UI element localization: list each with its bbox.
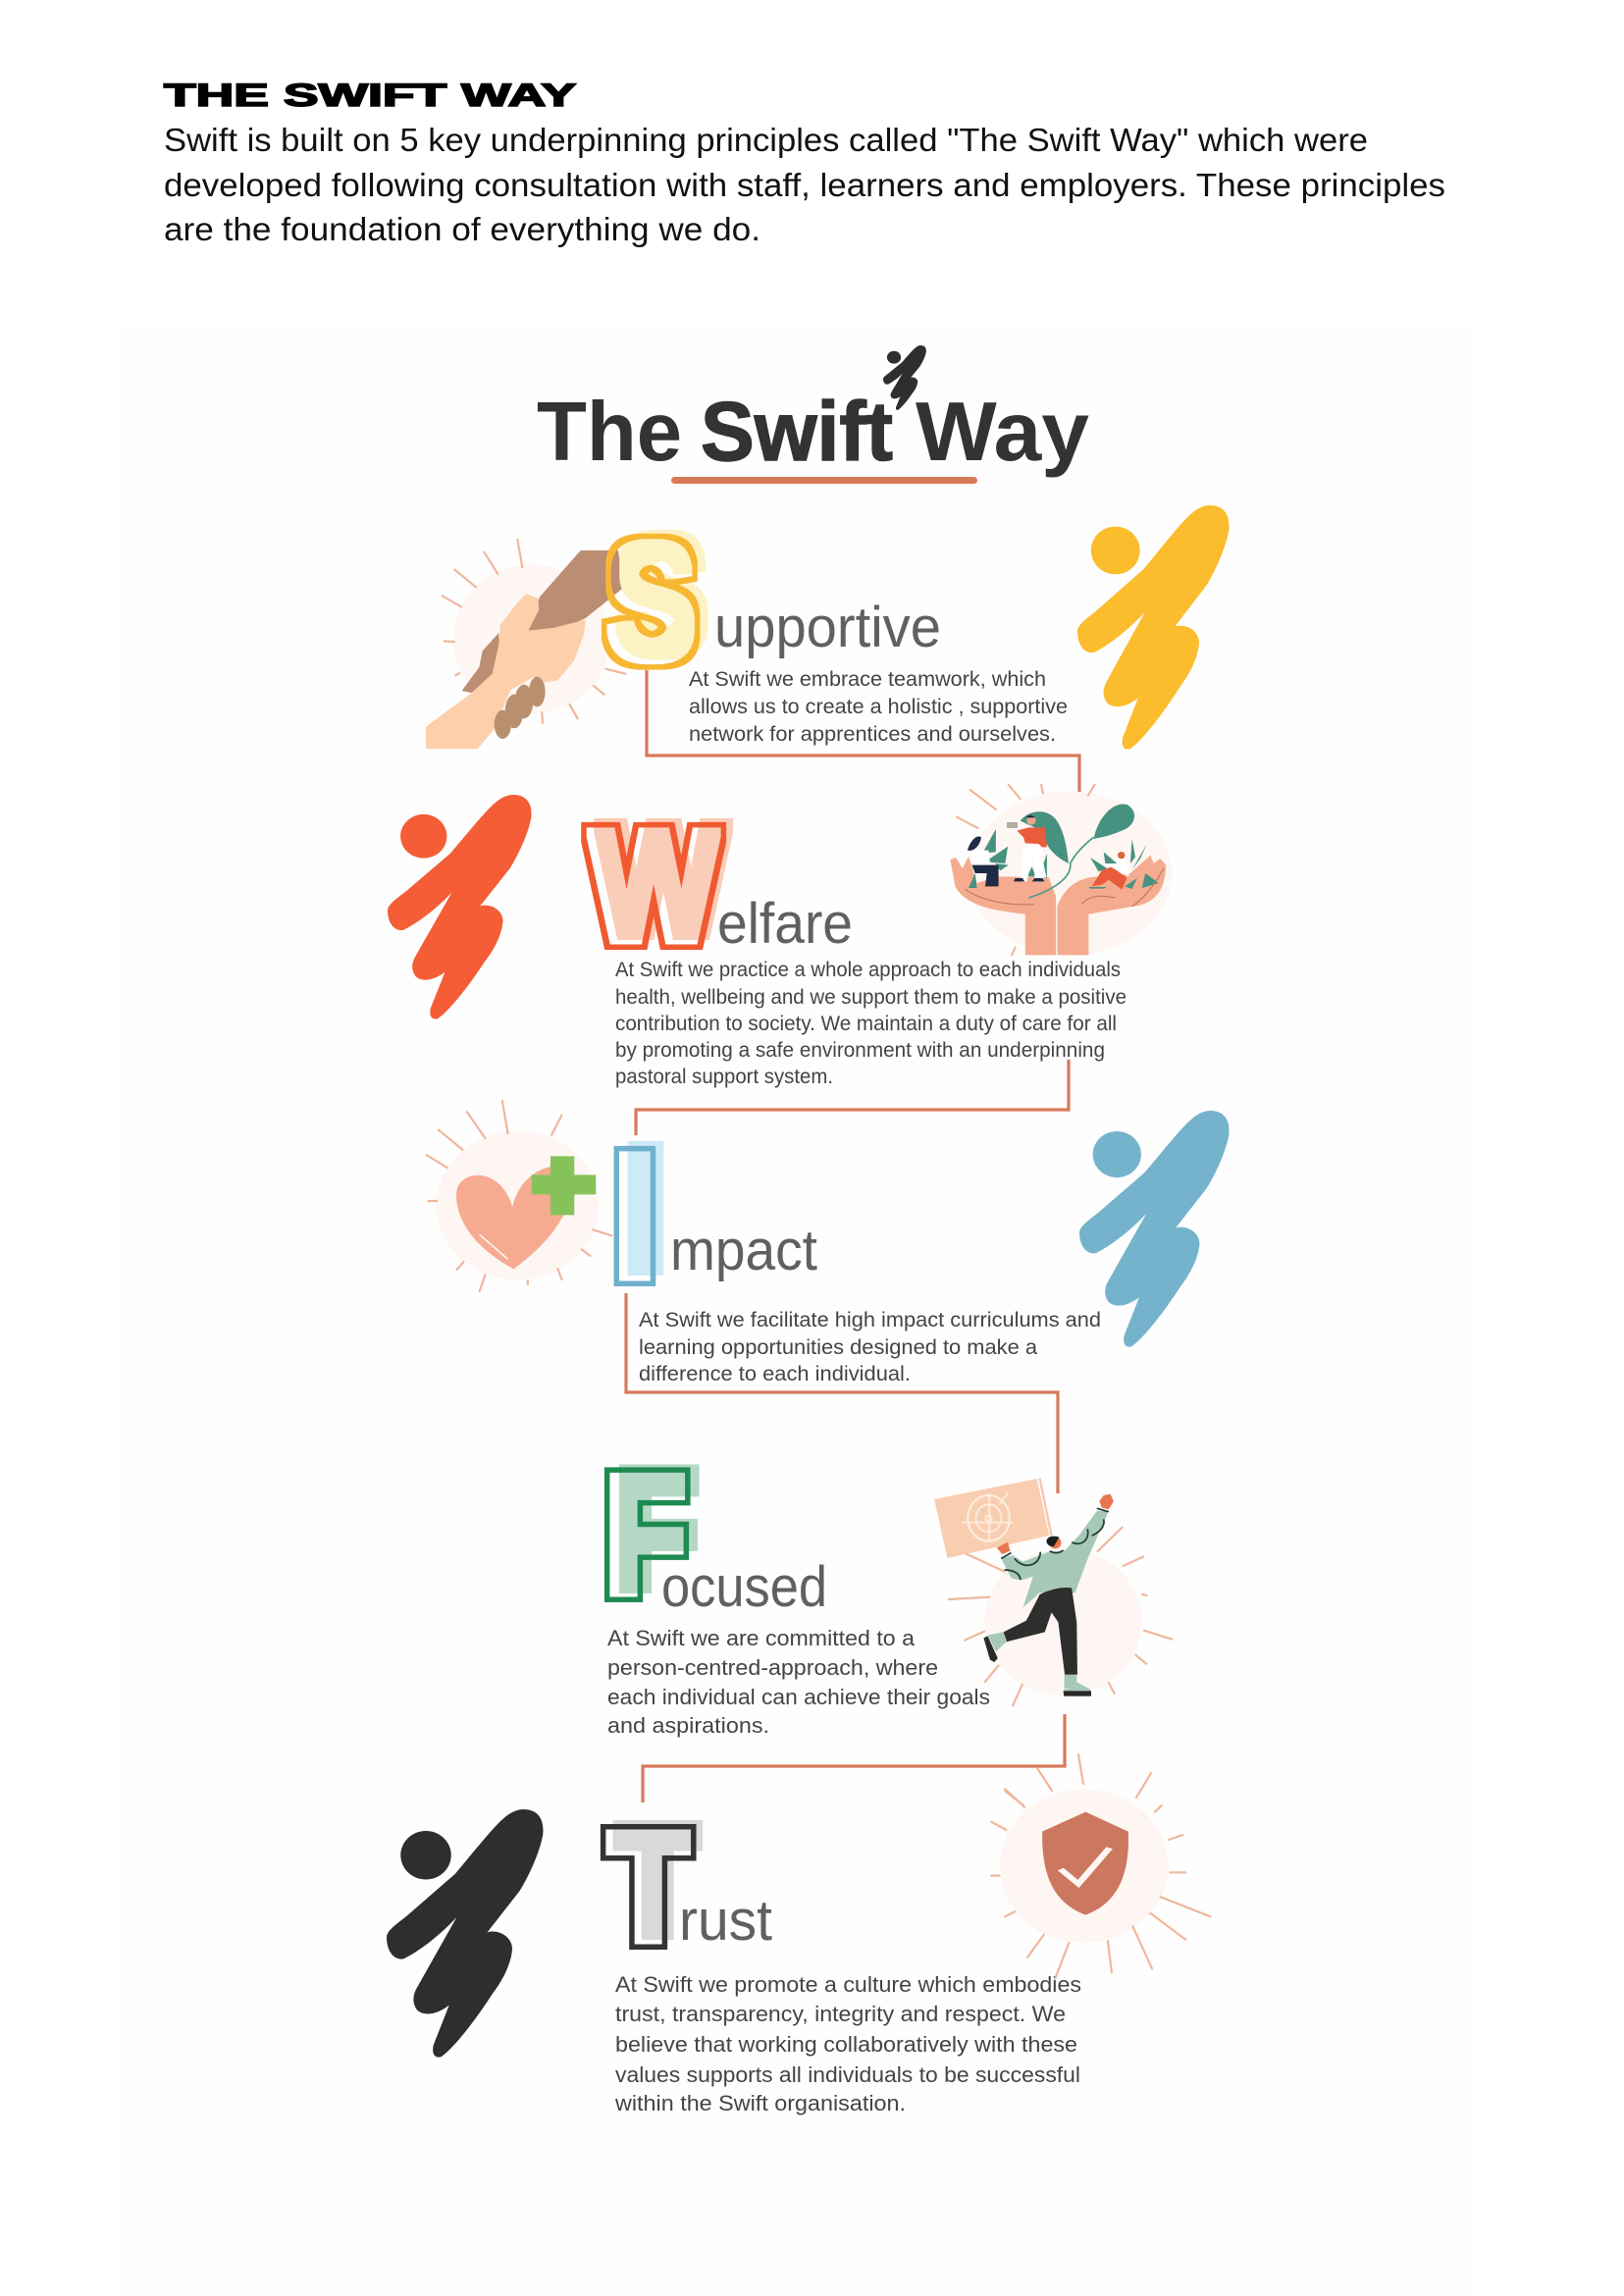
word: ocused: ocused bbox=[661, 1555, 827, 1619]
heading: The Swift Way section title: THE SWIFT WAY bbox=[164, 78, 576, 113]
text: impact description: difference to each individual. bbox=[639, 1363, 911, 1385]
graphic title: The Swift Way: The bbox=[537, 386, 682, 479]
panel: Focused bbox=[605, 1435, 1172, 1738]
text: trust description: values supports all individuals to be successful bbox=[615, 2062, 1080, 2087]
intro text block: Swift is built on 5 key underpinning principles called "The Swift Way" which were bbox=[164, 122, 1368, 158]
icon: black swift bolt bbox=[387, 1809, 543, 2058]
text: supportive description: network for apprentices and ourselves. bbox=[689, 723, 1056, 746]
text: focused description bbox=[607, 1626, 990, 1738]
text: trust description: At Swift we promote a culture which embodies bbox=[615, 1972, 1081, 1997]
letter S: S bbox=[618, 503, 707, 687]
graphic title: The Swift Way bbox=[537, 386, 1089, 479]
connector lines between principles bbox=[626, 670, 1079, 1802]
text: trust description: believe that working collaboratively with these bbox=[615, 2032, 1077, 2057]
text: supportive description: allows us to create a holistic , supportive bbox=[689, 696, 1068, 718]
word: upportive: upportive bbox=[714, 596, 941, 659]
letter F: F bbox=[617, 1435, 697, 1623]
text: trust description: within the Swift organisation. bbox=[614, 2091, 906, 2115]
text: welfare description: pastoral support system. bbox=[615, 1066, 833, 1088]
letter S: S bbox=[607, 510, 696, 694]
letter I: I bbox=[613, 1118, 656, 1314]
letter T: T bbox=[618, 1794, 698, 1966]
text: trust description: trust, transparency, integrity and respect. We bbox=[615, 2002, 1066, 2026]
letter F: F bbox=[605, 1441, 685, 1629]
icon: small swift logo bbox=[883, 345, 926, 410]
icon: clasped hands bbox=[426, 540, 625, 749]
text: supportive description: At Swift we embrace teamwork, which bbox=[689, 668, 1046, 691]
text: welfare description: contribution to society. We maintain a duty of care for all bbox=[615, 1013, 1117, 1035]
text: impact description: learning opportunities designed to make a bbox=[639, 1336, 1037, 1359]
text: focused description: person-centred-approach, where bbox=[607, 1655, 938, 1680]
letter W: W bbox=[601, 793, 726, 966]
title underline bbox=[671, 477, 977, 484]
text: focused description: each individual can achieve their goals bbox=[607, 1685, 990, 1709]
icon: blue swift bolt bbox=[1079, 1111, 1230, 1347]
icon: heart with plus bbox=[427, 1101, 611, 1291]
panel: Impact bbox=[427, 1101, 1230, 1385]
letter T: T bbox=[608, 1800, 688, 1973]
text: focused description: and aspirations. bbox=[607, 1713, 769, 1738]
word: rust: rust bbox=[679, 1889, 772, 1953]
panel: Supportive bbox=[426, 503, 1230, 750]
icon: red swift bolt bbox=[388, 795, 532, 1018]
text: trust description bbox=[614, 1972, 1081, 2115]
intro text block bbox=[164, 122, 1445, 247]
word: mpact: mpact bbox=[670, 1219, 817, 1282]
text: welfare description: At Swift we practice a whole approach to each individuals bbox=[615, 959, 1121, 981]
text: impact description: At Swift we facilitate high impact curriculums and bbox=[639, 1309, 1101, 1331]
letter I: I bbox=[624, 1110, 667, 1306]
graphic title: The Swift Way: Way bbox=[916, 386, 1089, 479]
word: elfare: elfare bbox=[717, 892, 853, 956]
text: impact description bbox=[639, 1309, 1101, 1385]
graphic title: The Swift Way: Swift bbox=[701, 386, 893, 479]
text: welfare description bbox=[615, 959, 1126, 1088]
icon: yellow swift bolt bbox=[1077, 505, 1230, 750]
text: focused description: At Swift we are committed to a bbox=[607, 1626, 916, 1650]
text: welfare description: health, wellbeing and we support them to make a positive bbox=[615, 986, 1126, 1009]
panel: Trust bbox=[387, 1754, 1211, 2115]
letter W: W bbox=[591, 800, 716, 973]
intro text block: are the foundation of everything we do. bbox=[164, 211, 760, 247]
icon: hands holding plants and people bbox=[950, 785, 1172, 955]
text: supportive description bbox=[689, 668, 1068, 746]
icon: person holding target sign bbox=[934, 1479, 1172, 1705]
icon: shield with check bbox=[991, 1754, 1211, 1979]
intro text block: developed following consultation with staff, learners and employers. These principles bbox=[164, 167, 1445, 203]
text: welfare description: by promoting a safe environment with an underpinning bbox=[615, 1039, 1105, 1062]
panel: Welfare bbox=[388, 785, 1172, 1088]
